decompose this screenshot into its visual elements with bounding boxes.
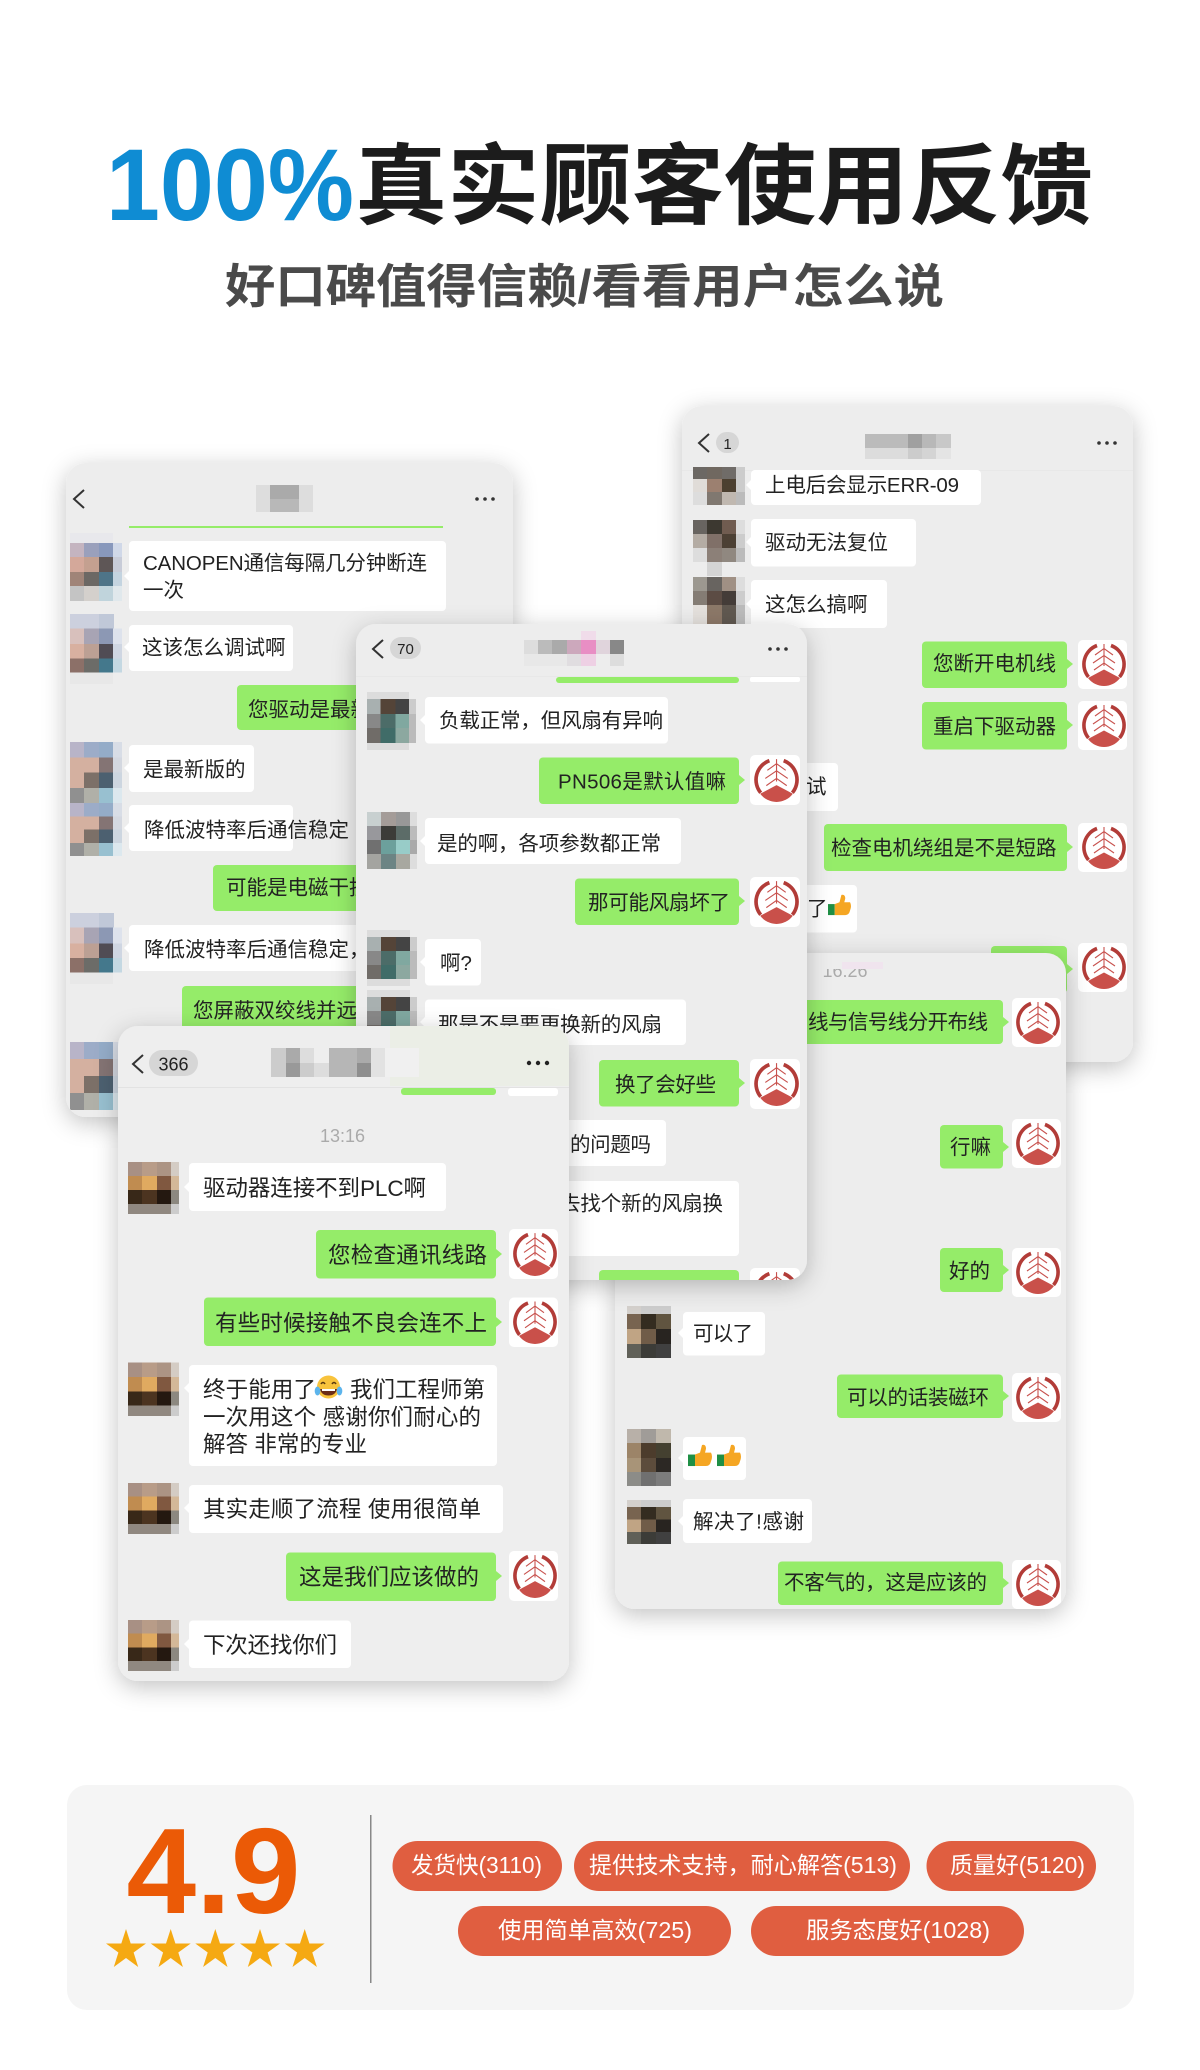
message — [184, 1485, 503, 1533]
tag: 质量好 — [926, 1841, 1096, 1891]
message — [420, 1000, 686, 1045]
message: partly hidden with emoji — [807, 885, 857, 932]
message: green reply: 好的 — [949, 1260, 990, 1283]
avatar — [70, 543, 122, 601]
tag: 提供技术支持: 提供技术支持，耐心解答(513) — [589, 1852, 897, 1878]
avatar: brand logo — [509, 1229, 558, 1279]
unread badge — [149, 1050, 198, 1076]
message: green reply — [991, 946, 1073, 993]
avatar — [70, 614, 122, 672]
avatar: brand logo — [1078, 640, 1127, 689]
message: green reply: 有些时候接触不良会连不上 — [215, 1311, 487, 1336]
panel: chat D — [682, 406, 1133, 1062]
message: multi-line with emoji: 一次用这个 感谢你们耐心的 — [203, 1405, 481, 1430]
blurred contact name — [256, 485, 313, 512]
message: green reply: 行嘛 — [950, 1136, 991, 1159]
message: partly hidden: 去找个新的风扇换 — [560, 1192, 723, 1216]
icon: more dots — [475, 497, 495, 501]
avatar: brand logo — [750, 1059, 800, 1109]
message: 其实走顺了流程 使用很简单 — [203, 1497, 481, 1522]
icon: five stars — [106, 1929, 325, 1967]
message: green reply: 重启下驱动器 — [933, 716, 1056, 738]
message: multi-line with emoji — [184, 1365, 497, 1466]
avatar — [70, 1042, 122, 1110]
timestamp: 16:26 — [822, 961, 868, 981]
avatar: brand logo — [509, 1298, 558, 1347]
avatar: brand logo — [1078, 701, 1127, 750]
icon: laughing emoji — [315, 1376, 342, 1398]
icon: more dots — [768, 647, 788, 651]
message — [678, 1499, 812, 1543]
message: green reply: 您检查通讯线路 — [328, 1243, 487, 1268]
tag: 使用简单高效 — [458, 1906, 731, 1956]
avatar: brand logo — [1012, 998, 1061, 1047]
message: multi-line with emoji: 我们工程师第 — [350, 1378, 485, 1402]
message: green reply: 检查电机绕组是不是短路 — [831, 837, 1056, 860]
unread badge — [716, 432, 739, 453]
message: green reply — [837, 1374, 1009, 1418]
avatar — [367, 812, 417, 869]
message — [746, 580, 887, 628]
avatar: brand logo — [1078, 823, 1127, 872]
avatar — [627, 1500, 671, 1544]
icon: more dots — [1097, 441, 1117, 445]
avatar — [70, 742, 122, 803]
avatar — [627, 1429, 671, 1486]
icon: more dots — [527, 1061, 549, 1065]
avatar: brand logo — [509, 1551, 558, 1601]
avatar — [70, 803, 122, 856]
avatar — [693, 520, 745, 576]
message: multi-line with emoji: 终于能用了 — [203, 1378, 316, 1402]
unread badge: 366 — [158, 1054, 189, 1074]
message: green reply: 换了会好些 — [615, 1074, 716, 1096]
message — [124, 805, 349, 851]
avatar — [128, 1483, 179, 1534]
avatar: brand logo — [1012, 1248, 1061, 1297]
tag: 质量好: 质量好(5120) — [950, 1852, 1085, 1878]
message: CANOPEN: 一次 — [143, 579, 184, 602]
avatar — [70, 913, 122, 972]
avatar — [128, 1162, 179, 1214]
message: partly hidden: 的问题吗 — [570, 1134, 651, 1156]
rating score: 4.9 — [126, 1803, 300, 1939]
title — [106, 128, 1093, 242]
avatar — [367, 930, 417, 986]
title: 真实顾客使用反馈 — [355, 137, 1093, 236]
message: 啊? — [440, 952, 472, 975]
message: green reply: 可能是电磁干扰 — [226, 876, 370, 900]
message: green reply — [213, 865, 356, 911]
message: green reply: 您断开电机线 — [933, 652, 1056, 676]
message — [184, 1620, 351, 1668]
message: green reply — [599, 1060, 745, 1106]
avatar: brand logo — [750, 1268, 800, 1318]
subtitle: 好口碑值得信赖/看看用户怎么说 — [225, 260, 944, 313]
message — [124, 925, 356, 971]
message: 驱动无法复位 — [765, 532, 888, 554]
message: 下次还找你们 — [203, 1633, 337, 1658]
message: green reply: 线与信号线分开布线 — [808, 1011, 988, 1034]
timestamp: 13:16 — [320, 1126, 365, 1146]
avatar — [367, 692, 416, 750]
icon: back chevron — [74, 490, 84, 508]
message — [124, 625, 293, 671]
blurred contact name — [524, 631, 624, 666]
avatar: brand logo — [1012, 1560, 1061, 1609]
message: 降低波特率后通信稳定 — [144, 819, 349, 842]
message: green reply — [940, 1125, 1009, 1168]
avatar — [627, 1306, 671, 1358]
panel: chat E — [615, 953, 1066, 1609]
unread badge — [390, 637, 421, 659]
avatar — [128, 1620, 179, 1671]
message: green reply — [778, 1562, 1009, 1605]
message: 这怎么搞啊 — [765, 594, 868, 616]
title: 100% — [106, 128, 354, 242]
message: CANOPEN: CANOPEN通信每隔几分钟断连 — [143, 552, 427, 575]
message: green reply: 您驱动是最新 — [248, 698, 371, 722]
message: thumbs up emoji — [678, 1437, 746, 1480]
message — [184, 1163, 446, 1211]
unread badge: 70 — [397, 641, 414, 658]
avatar — [128, 1362, 179, 1416]
message: green reply — [286, 1552, 502, 1601]
message: green reply — [940, 1248, 1009, 1292]
message — [420, 939, 481, 986]
message: green reply — [824, 824, 1073, 871]
message — [124, 745, 254, 792]
tag: 服务态度好: 服务态度好(1028) — [806, 1917, 990, 1943]
message: 可以了 — [693, 1322, 753, 1346]
message: 是的啊，各项参数都正常 — [437, 832, 661, 856]
message: partly hidden with emoji: 了 — [807, 898, 828, 920]
avatar: brand logo — [750, 877, 800, 927]
message: green reply — [316, 1230, 502, 1278]
message: green reply: PN506是默认值嘛 — [558, 770, 726, 794]
avatar — [693, 467, 745, 505]
message: green reply — [575, 878, 745, 925]
message: green reply — [599, 1270, 739, 1300]
message — [420, 697, 668, 744]
message: green reply: 这是我们应该做的 — [299, 1565, 479, 1590]
tag: 服务态度好 — [751, 1906, 1024, 1956]
message: 那是不是要更换新的风扇 — [438, 1014, 662, 1036]
message: green reply — [204, 1298, 502, 1346]
blurred contact name — [271, 1048, 419, 1077]
tag: 发货快 — [392, 1841, 562, 1891]
message: 解决了!感谢 — [693, 1510, 804, 1534]
icon: back chevron — [133, 1055, 143, 1073]
unread badge: 1 — [723, 436, 732, 453]
message — [746, 519, 916, 566]
message — [420, 818, 681, 864]
message: green reply — [700, 1000, 1009, 1044]
message: green reply — [922, 642, 1073, 688]
avatar: brand logo — [1012, 1373, 1061, 1422]
message: green reply — [182, 986, 356, 1026]
avatar: brand logo — [1078, 943, 1127, 992]
panel: chat B — [356, 624, 807, 1318]
icon: back chevron — [699, 434, 709, 452]
panel: chat A — [66, 463, 513, 1117]
message: green reply — [539, 758, 745, 804]
message: 降低波特率后通信稳定， — [144, 938, 370, 962]
icon: back chevron — [373, 640, 383, 658]
message: green reply — [922, 702, 1073, 750]
tag: 使用简单高效: 使用简单高效(725) — [498, 1917, 692, 1943]
message: 负载正常，但风扇有异响 — [439, 710, 663, 732]
blurred contact name — [865, 434, 951, 459]
message: 驱动器连接不到PLC啊 — [203, 1176, 426, 1201]
avatar: brand logo — [750, 755, 800, 805]
message: CANOPEN — [124, 541, 446, 611]
panel: chat C — [118, 1026, 569, 1681]
message: 这该怎么调试啊 — [142, 636, 286, 660]
message: green reply: 那可能风扇坏了 — [588, 892, 730, 914]
message: partly hidden — [470, 1120, 666, 1166]
message: 是最新版的 — [143, 758, 246, 782]
message: partly hidden: 试 — [806, 776, 826, 798]
panel: rating summary — [67, 1785, 1134, 2010]
message: 上电后会显示ERR-09 — [765, 474, 959, 497]
avatar — [693, 577, 745, 625]
message: green reply: 可以的话装磁环 — [847, 1386, 989, 1410]
message — [746, 470, 981, 505]
message: multi-line with emoji: 解答 非常的专业 — [203, 1432, 367, 1457]
avatar — [367, 990, 417, 1046]
message — [678, 1312, 765, 1356]
avatar: brand logo — [1012, 1119, 1061, 1168]
message: green reply: 不客气的，这是应该的 — [784, 1572, 987, 1594]
tag: 发货快: 发货快(3110) — [411, 1852, 542, 1878]
message: green reply: 您屏蔽双绞线并远 — [193, 1000, 357, 1022]
message: partly hidden — [807, 763, 838, 811]
message: green reply — [237, 685, 356, 730]
message: partly hidden — [470, 1181, 739, 1256]
tag: 提供技术支持 — [574, 1841, 910, 1891]
